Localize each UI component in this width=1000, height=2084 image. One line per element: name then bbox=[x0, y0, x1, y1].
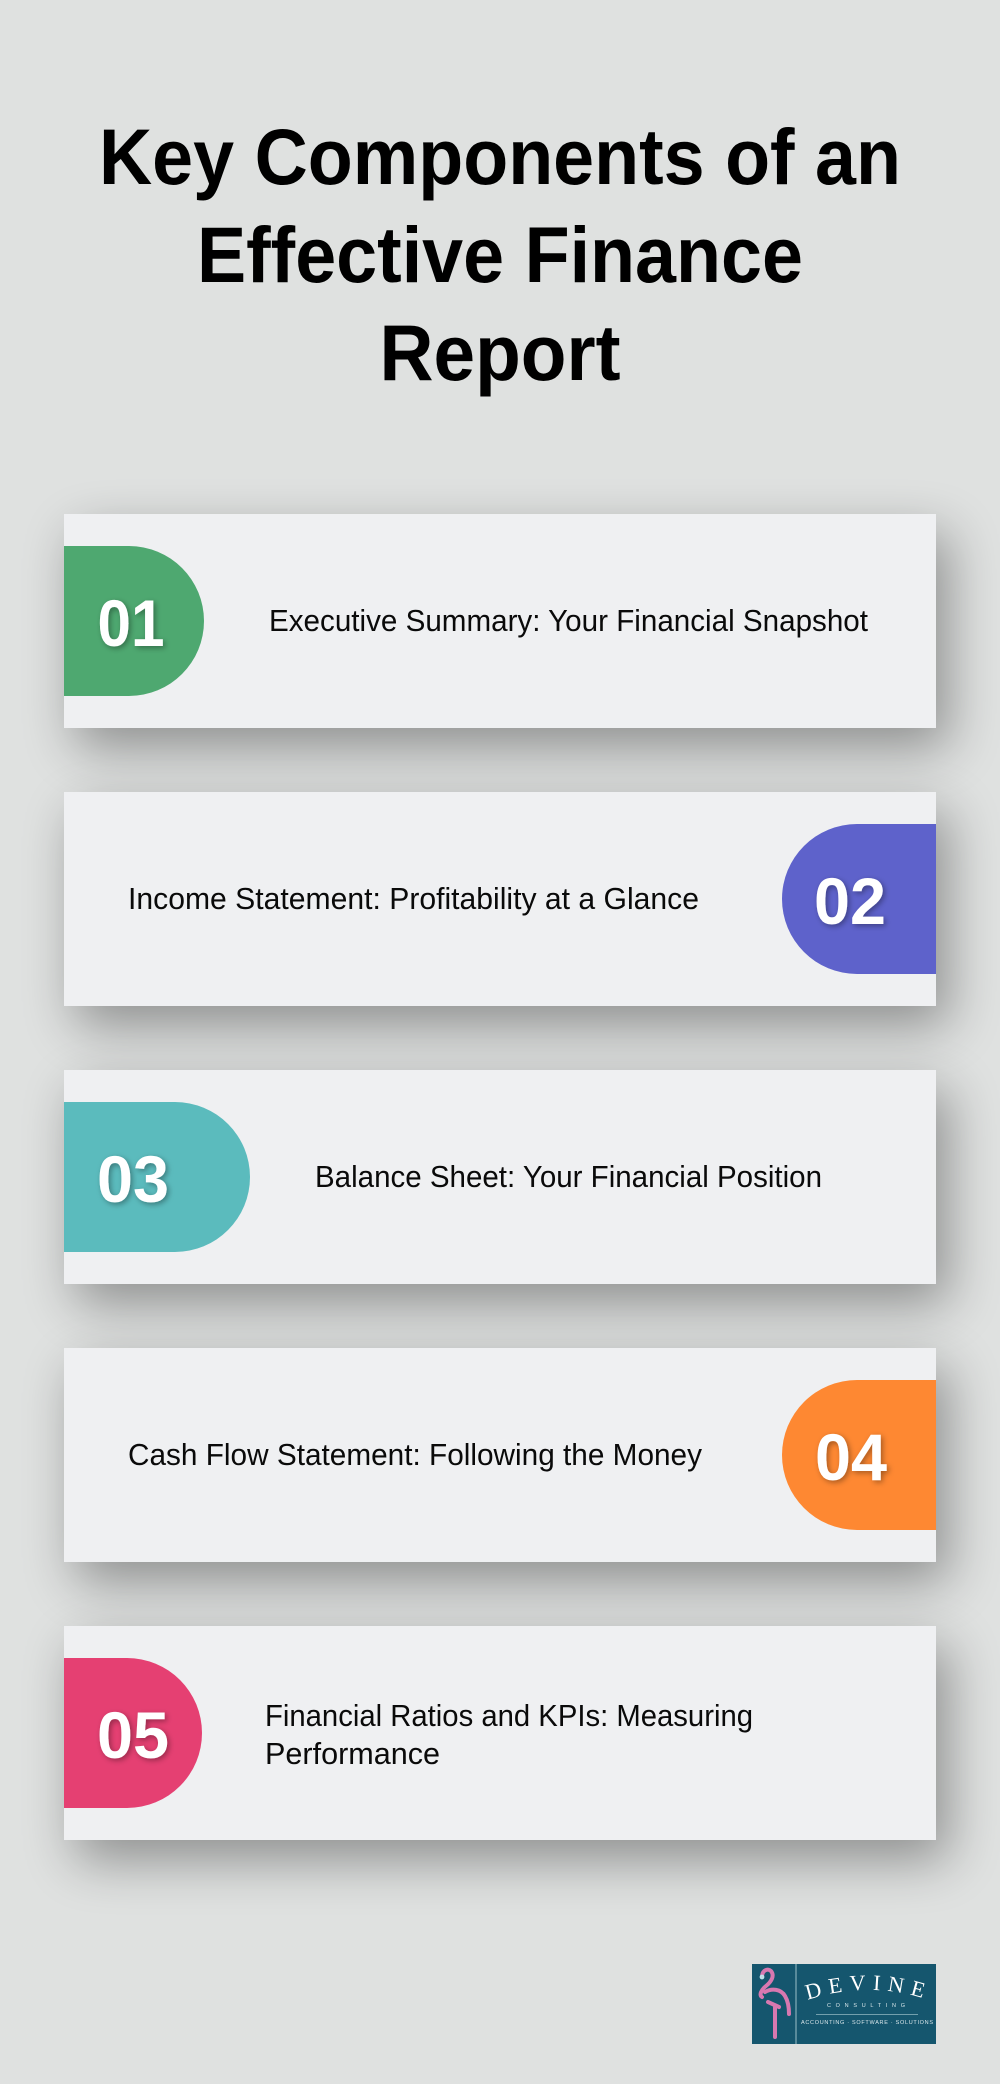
badge 01 bbox=[64, 546, 204, 696]
logo: Devine Consulting: CONSULTING bbox=[827, 2003, 905, 2009]
panel: 02 income statement bbox=[64, 792, 948, 1026]
icon: flamingo bbox=[761, 1970, 789, 2037]
title: Report bbox=[380, 308, 620, 397]
number 01: 01 bbox=[98, 586, 164, 660]
text: executive summary: Executive Summary: Your Financial Snapshot bbox=[269, 603, 868, 638]
logo: Devine Consulting bbox=[752, 1964, 936, 2044]
number 05: 05 bbox=[97, 1698, 169, 1772]
number 02: 02 bbox=[814, 864, 886, 938]
text: cash flow: Cash Flow Statement: Following the Money bbox=[128, 1437, 702, 1472]
logo: Devine Consulting: ACCOUNTING · SOFTWARE · SOLUTIONS bbox=[801, 2020, 933, 2026]
title: Key Components of an bbox=[99, 112, 901, 201]
panel: 05 financial ratios: Performance bbox=[265, 1736, 440, 1771]
number 03: 03 bbox=[97, 1142, 169, 1216]
text: financial ratios: Financial Ratios and KPIs: Measuring bbox=[265, 1698, 753, 1733]
panel: 05 financial ratios bbox=[64, 1626, 948, 1860]
panel: 03 balance sheet bbox=[64, 1070, 948, 1304]
title bbox=[99, 112, 901, 397]
title: Effective Finance bbox=[197, 210, 803, 299]
number 04: 04 bbox=[815, 1420, 887, 1494]
text: balance sheet: Balance Sheet: Your Financial Position bbox=[315, 1159, 822, 1194]
panel: 01 executive summary bbox=[64, 514, 948, 748]
badge 05 bbox=[64, 1658, 202, 1808]
badge 04 bbox=[782, 1380, 936, 1530]
panel: 04 cash flow bbox=[64, 1348, 948, 1582]
logo: Devine Consulting: DEVINE bbox=[804, 1976, 924, 2000]
badge 03 bbox=[64, 1102, 250, 1252]
badge 02 bbox=[782, 824, 936, 974]
text: income statement: Income Statement: Profitability at a Glance bbox=[128, 881, 699, 916]
